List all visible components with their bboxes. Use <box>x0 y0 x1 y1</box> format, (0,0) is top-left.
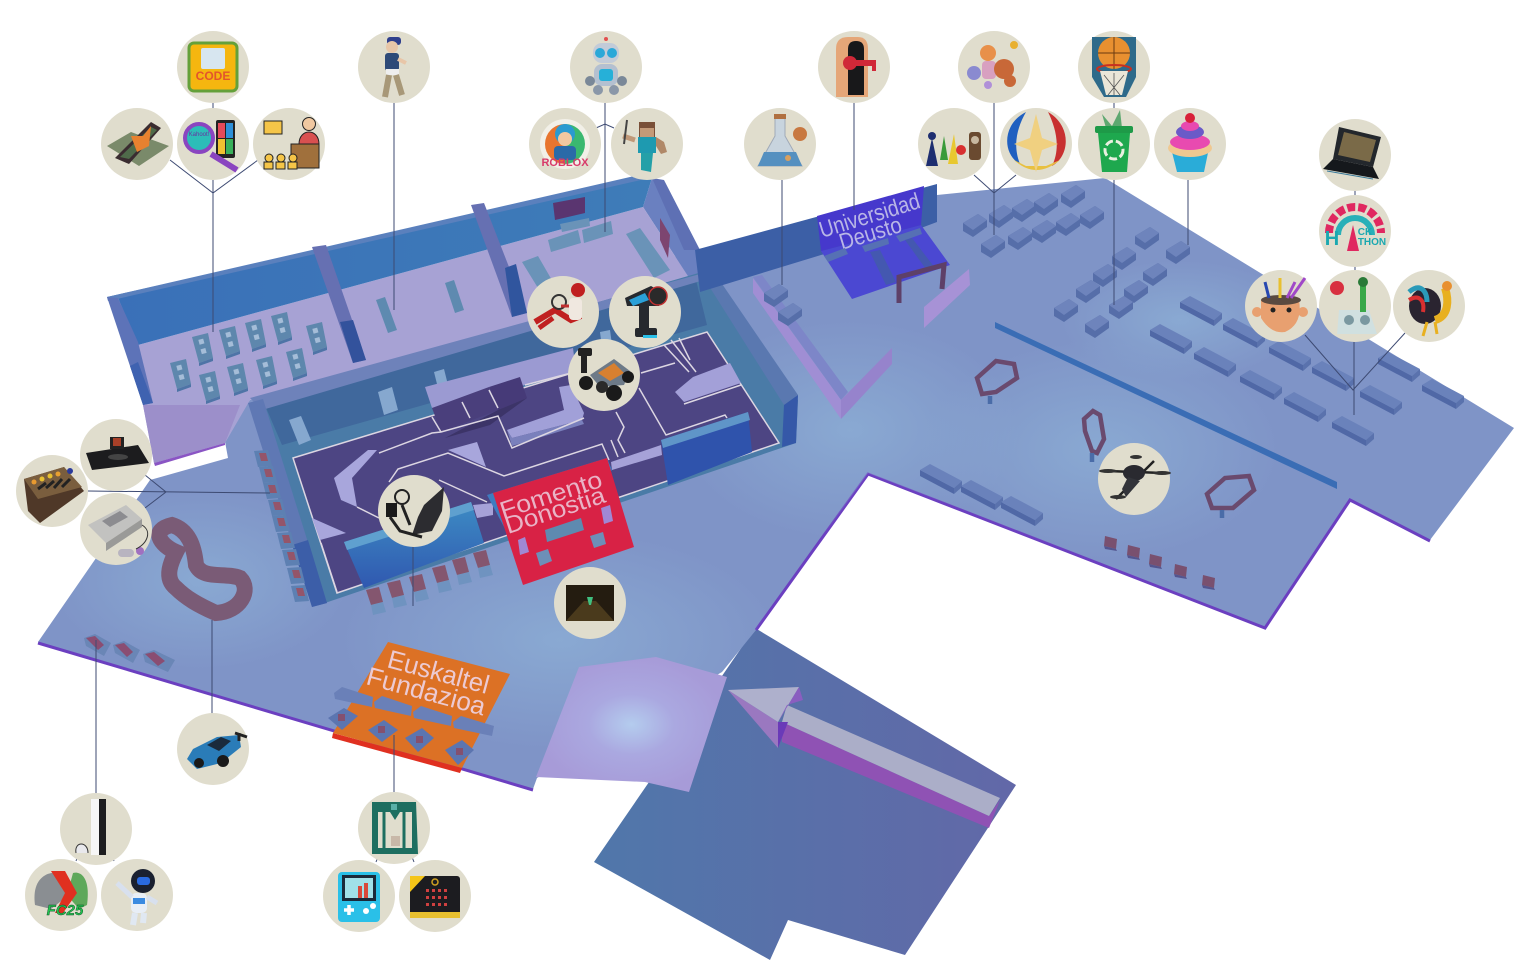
icon: 3D printer <box>358 792 430 864</box>
sponsor: Euskaltel Fundazioa <box>328 642 510 773</box>
lower hall floor <box>594 628 1016 960</box>
icon: roblox <box>529 108 601 180</box>
tables <box>764 185 1190 338</box>
icon: rugged laptop <box>1319 119 1391 191</box>
icon: FC25 <box>25 859 97 931</box>
gate <box>899 265 944 303</box>
icon: star logo <box>1000 108 1072 180</box>
connector lines <box>76 103 1405 862</box>
small maroon tables <box>1104 536 1215 590</box>
icon: AR phone <box>101 108 173 180</box>
icon: SNES <box>80 493 152 565</box>
sponsor: Universidad Deusto: Universidad <box>816 188 923 243</box>
wall behind university stand <box>695 184 937 292</box>
icon: minecraft <box>611 108 683 180</box>
sponsor: Fomento Donostia: Fomento <box>497 466 606 525</box>
icon: speaker <box>253 108 325 180</box>
icon: recycling bin <box>1078 108 1150 180</box>
icon: hackathon: CK <box>1358 227 1373 238</box>
icon: roblox: ROBLOX <box>541 157 589 169</box>
icon: VR player <box>358 31 430 103</box>
benches <box>920 296 1464 526</box>
icon: robot <box>570 31 642 103</box>
icon: astro bot <box>101 859 173 931</box>
sponsor: Universidad Deusto <box>816 186 950 299</box>
side tables <box>254 450 309 602</box>
icon: PS5 <box>60 793 132 865</box>
icon: door with key <box>818 31 890 103</box>
icon: race car <box>177 713 249 785</box>
sponsor: Euskaltel Fundazioa: Fundazioa <box>363 661 490 722</box>
right front wall <box>661 412 752 485</box>
icon: drone <box>1098 443 1171 515</box>
icon: hackathon: H <box>1325 228 1339 250</box>
icon: kahoot search: Kahoot! <box>189 132 210 138</box>
back room desks <box>170 218 670 404</box>
icon: RC car <box>568 339 640 411</box>
sponsor: Fomento Donostia: Donostia <box>502 482 609 540</box>
icon: sim racer <box>527 276 599 348</box>
race track loop <box>159 525 245 613</box>
icon: kids toys <box>958 31 1030 103</box>
icon: potion flask <box>744 108 816 180</box>
sponsor: Euskaltel Fundazioa: Euskaltel <box>384 644 493 700</box>
icon: hackathon <box>1319 195 1391 267</box>
floor edge <box>38 474 1430 790</box>
front seats <box>366 550 493 615</box>
track room <box>248 272 798 607</box>
icon: rooster <box>1393 270 1465 342</box>
icon: robotic printer <box>1319 270 1391 342</box>
icon: RC controller <box>609 276 681 348</box>
icon: basketball hoop <box>1078 31 1150 103</box>
icon: creative head <box>1245 270 1317 342</box>
left tables <box>84 634 175 672</box>
drone hoops <box>977 361 1254 518</box>
sponsor: Fomento Donostia <box>487 458 634 585</box>
icon: racing seat <box>378 475 450 547</box>
icon: kahoot search <box>177 108 249 180</box>
icon: game pieces <box>918 108 990 180</box>
direction arrow <box>728 687 1000 828</box>
icon: code: CODE <box>196 69 230 83</box>
sponsor: Universidad Deusto: Deusto <box>836 211 905 255</box>
icon: arcade box <box>16 455 88 527</box>
back room <box>107 172 700 466</box>
left front wall <box>344 502 484 588</box>
icon: game screenshot <box>554 567 626 639</box>
icon: FC25: FC25 <box>47 902 84 919</box>
main floor <box>38 178 1514 789</box>
icon: retro console <box>80 419 152 491</box>
race track floor <box>293 332 779 593</box>
entrance ramp <box>536 657 727 792</box>
floor lighting <box>108 283 1251 708</box>
partition walls <box>753 269 970 419</box>
icon: microbit <box>399 860 471 932</box>
stripe <box>995 322 1337 489</box>
icon: handheld <box>323 860 395 932</box>
icon: hackathon: THON <box>1358 237 1386 248</box>
icon: cupcake <box>1154 108 1226 180</box>
icon: code <box>177 31 249 103</box>
